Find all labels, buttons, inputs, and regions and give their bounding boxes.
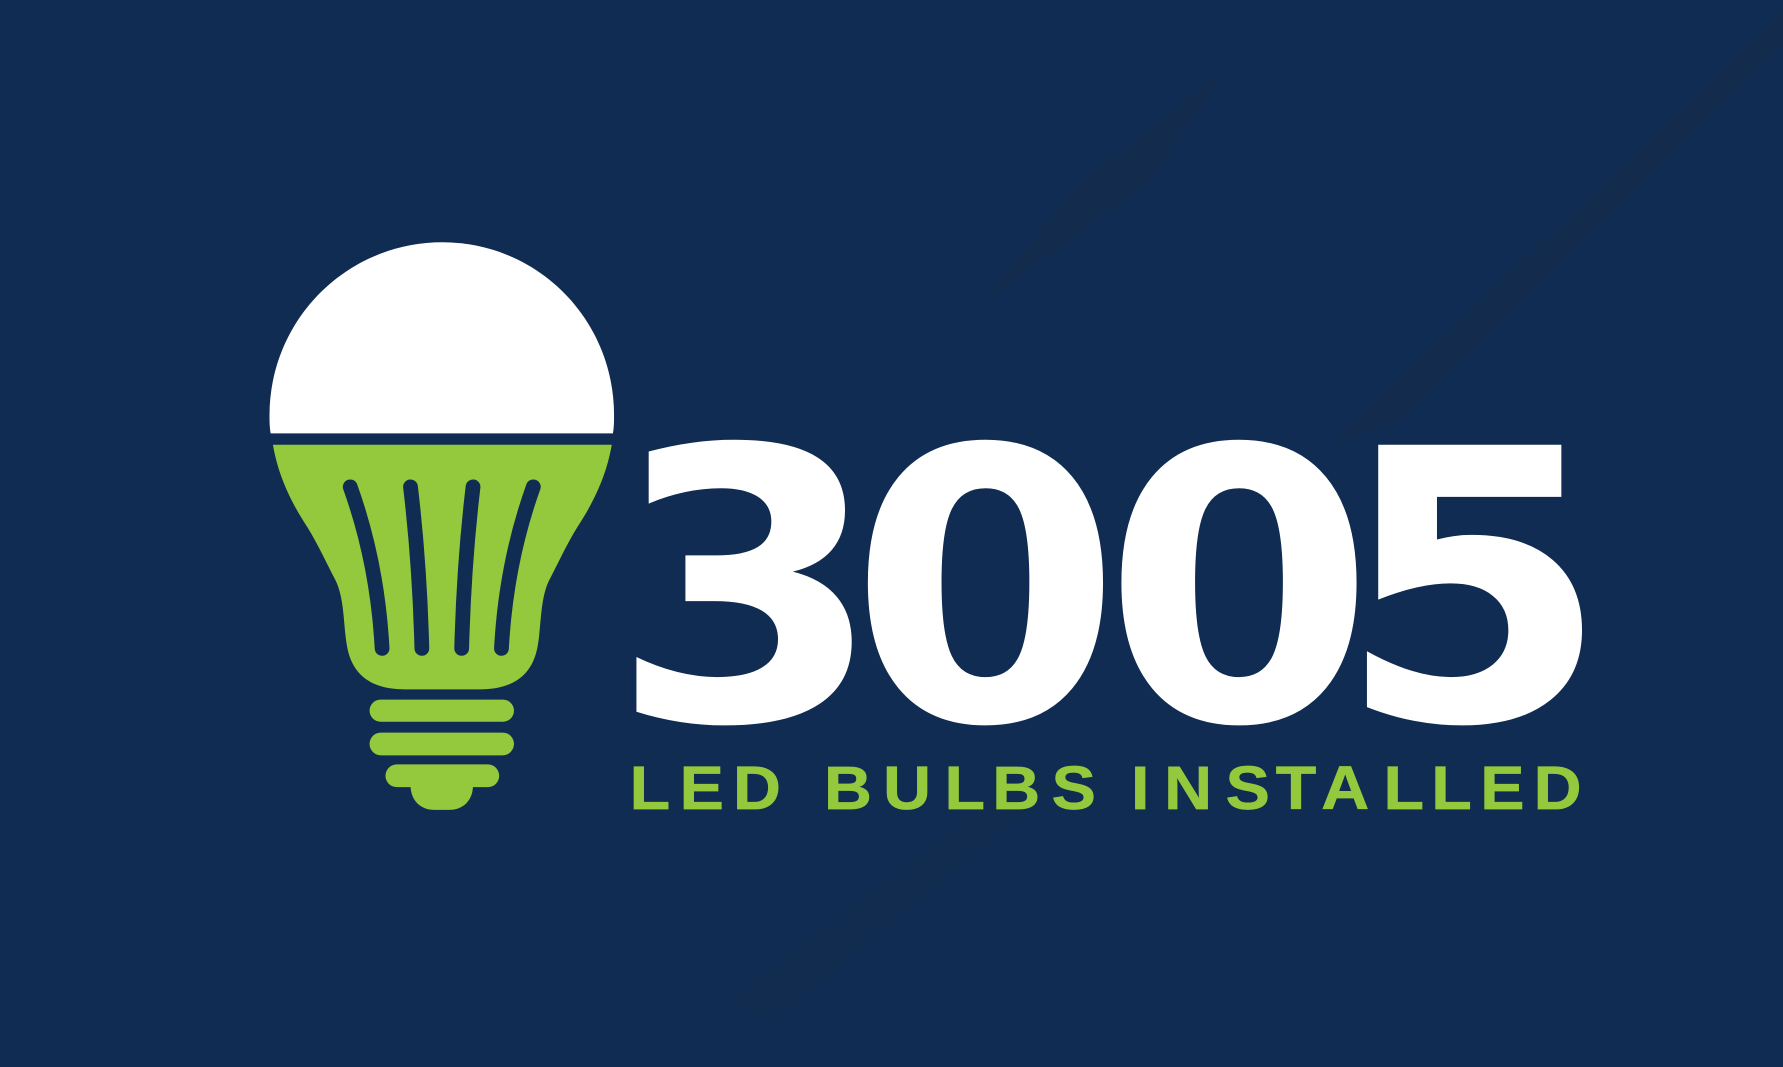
headline number: 3005 <box>610 370 1609 809</box>
bulb dome <box>269 242 614 433</box>
icon: LED light bulb <box>269 242 614 810</box>
bulb heat-sink body <box>273 445 612 689</box>
heat-sink slots <box>350 487 533 648</box>
subtitle: LEDBULBSINSTALLED <box>630 753 1582 822</box>
screw base <box>370 700 514 810</box>
